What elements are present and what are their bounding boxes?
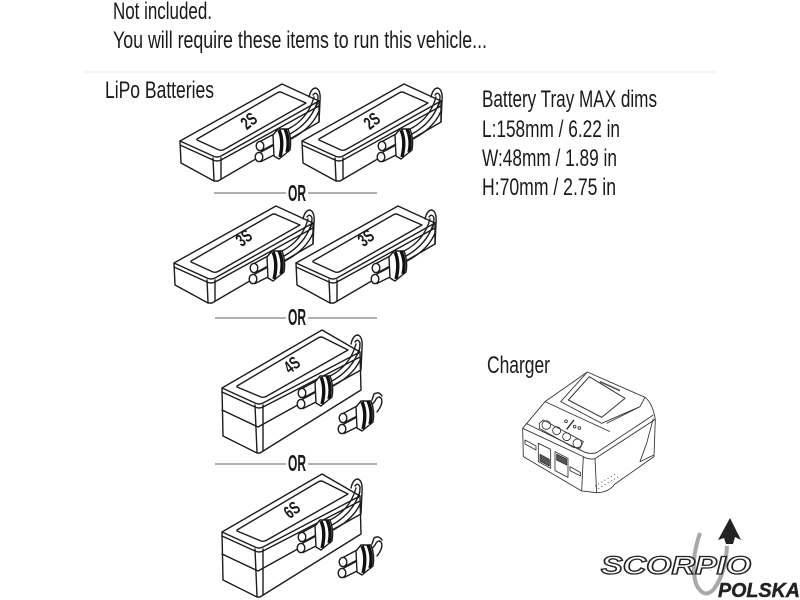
battery: 3S left [174,206,314,303]
text block: battery tray max dimensions: Battery Tray MAX dims [482,86,657,113]
battery: 4S: 4S [280,353,304,377]
heading: LiPo Batteries: LiPo Batteries [105,77,214,104]
heading: Charger: Charger [487,352,550,379]
connector: 4S adapter [338,393,382,434]
heading: requirement note: You will require these items to run this vehicle... [113,27,487,54]
battery: 4S [222,330,362,453]
battery: 3S right: 3S [354,226,378,250]
battery: 3S left: 3S [232,226,256,250]
battery: 6S: 6S [280,498,304,522]
battery: 6S [222,474,362,597]
logo wordmark: SCORPIO [601,552,752,580]
battery: 2S left [180,84,320,181]
text block: battery tray max dimensions: L:158mm / 6.22 in [482,116,620,143]
divider: OR 2: OR [288,304,306,330]
connector: 6S adapter [338,537,382,578]
text block: battery tray max dimensions: W:48mm / 1.89 in [482,145,617,172]
text block: battery tray max dimensions: H:70mm / 2.75 in [482,174,616,201]
battery: 2S left: 2S [237,109,261,133]
icon: charger [523,372,655,493]
battery: 3S right [296,206,436,303]
battery: 2S right [302,84,442,181]
logo arrow [718,518,741,544]
logo swoosh [694,533,727,593]
battery: 2S right: 2S [360,109,384,133]
text block: battery tray max dimensions [482,86,657,201]
divider: OR 1: OR [288,180,306,206]
logo: Scorpio Polska [601,518,800,600]
divider: OR 3: OR [288,450,306,476]
